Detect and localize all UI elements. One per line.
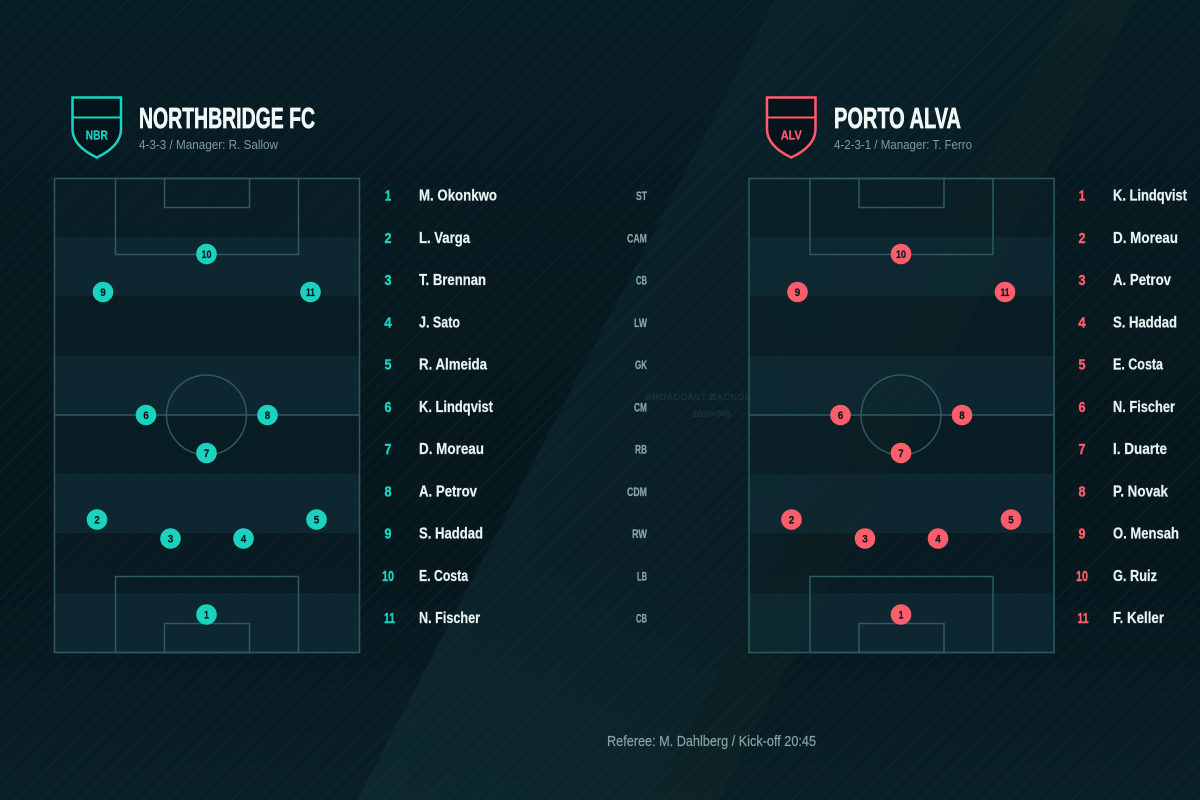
player markers: Northbridge FC: 10 (202, 249, 212, 261)
player markers: Porto Alva (781, 244, 1021, 625)
roster: Northbridge FC: N. Fischer (419, 610, 480, 627)
roster: Northbridge FC: E. Costa (419, 568, 468, 585)
player markers: Northbridge FC: 8 (265, 410, 270, 422)
roster: Porto Alva: 5 (1078, 357, 1086, 374)
roster: Porto Alva: 4 (1078, 314, 1086, 331)
roster: Northbridge FC: 1 (385, 188, 391, 204)
player markers: Northbridge FC: 11 (306, 287, 315, 299)
roster: Porto Alva: O. Mensah (1113, 526, 1179, 543)
roster: Northbridge FC: R. Almeida (419, 357, 487, 374)
player markers: Northbridge FC: 7 (204, 448, 209, 460)
roster: Northbridge FC: 11 (384, 610, 395, 627)
roster: Northbridge FC: 6 (384, 399, 392, 416)
roster: Northbridge FC: D. Moreau (419, 441, 484, 458)
roster: Northbridge FC: LB (637, 569, 647, 583)
roster: Northbridge FC: RW (632, 527, 648, 541)
roster: Porto Alva: 2 (1078, 230, 1086, 247)
team name: NORTHBRIDGE FC (139, 103, 315, 135)
player markers: Northbridge FC: 3 (168, 534, 173, 546)
roster: Northbridge FC: CM (634, 400, 647, 414)
roster: Northbridge FC: 8 (384, 483, 392, 500)
pitch: Northbridge FC (54, 178, 360, 652)
crest: ALV: ALV (781, 128, 802, 142)
player markers: Porto Alva: 2 (789, 514, 794, 526)
roster: Porto Alva: A. Petrov (1113, 272, 1171, 289)
player markers: Porto Alva: 10 (896, 249, 906, 261)
roster: Porto Alva: 7 (1078, 441, 1086, 458)
player markers: Porto Alva: 11 (1000, 287, 1010, 299)
roster: Northbridge FC: 4 (384, 314, 392, 331)
roster: Porto Alva: P. Novak (1113, 483, 1168, 500)
pitch: Porto Alva (748, 178, 1054, 652)
roster: Northbridge FC: A. Petrov (419, 483, 477, 500)
roster: Porto Alva: I. Duarte (1113, 441, 1167, 458)
roster: Porto Alva: 11 (1078, 610, 1088, 627)
panel: Porto Alva (748, 98, 1187, 652)
player markers: Northbridge FC: 6 (143, 410, 149, 422)
roster: Northbridge FC: CB (636, 612, 647, 626)
formation and manager: 4-3-3 / Manager: R. Sallow (139, 137, 279, 152)
roster: Northbridge FC: 9 (384, 526, 392, 543)
roster: Porto Alva: G. Ruiz (1113, 568, 1157, 585)
roster: Northbridge FC: LW (634, 316, 647, 330)
roster: Porto Alva: 1 (1079, 188, 1085, 204)
roster: Porto Alva: S. Haddad (1113, 314, 1177, 331)
player markers: Porto Alva: 9 (795, 287, 800, 299)
watermark: BROADCAST BACKGROUND (645, 392, 780, 403)
roster: Northbridge FC: CB (636, 274, 647, 288)
roster: Northbridge FC: T. Brennan (419, 272, 486, 289)
player markers: Porto Alva: 4 (935, 534, 942, 546)
crest: ALV (767, 98, 816, 158)
roster: Northbridge FC: RB (635, 443, 647, 457)
player markers: Northbridge FC: 9 (100, 287, 106, 299)
panel: Northbridge FC (54, 98, 648, 652)
watermark: 1600×945 (692, 409, 732, 420)
player markers: Northbridge FC: 5 (314, 514, 319, 526)
player markers: Porto Alva: 1 (898, 610, 904, 622)
team header: Northbridge FC (72, 98, 315, 158)
roster: Northbridge FC: S. Haddad (419, 526, 483, 543)
roster: Northbridge FC: L. Varga (419, 230, 470, 247)
roster: Porto Alva: K. Lindqvist (1113, 188, 1187, 204)
crest: NBR (72, 98, 121, 158)
roster: Porto Alva: 9 (1078, 526, 1086, 543)
roster: Northbridge FC: GK (635, 358, 647, 372)
roster: Northbridge FC: K. Lindqvist (419, 399, 493, 416)
roster: Porto Alva (1076, 188, 1187, 627)
player markers: Porto Alva: 8 (959, 410, 965, 422)
roster: Northbridge FC: CAM (627, 231, 647, 245)
roster: Northbridge FC: M. Okonkwo (419, 188, 497, 204)
roster: Porto Alva: 10 (1076, 568, 1088, 585)
roster: Porto Alva: 3 (1078, 272, 1086, 289)
roster: Porto Alva: 6 (1078, 399, 1086, 416)
roster: Porto Alva: 8 (1078, 483, 1086, 500)
player markers: Porto Alva: 7 (898, 448, 904, 460)
crest: NBR: NBR (86, 128, 108, 142)
player markers: Porto Alva: 3 (862, 534, 868, 546)
roster: Northbridge FC: 3 (384, 272, 392, 289)
roster: Porto Alva: E. Costa (1113, 357, 1163, 374)
roster: Northbridge FC: ST (636, 189, 647, 203)
roster: Northbridge FC (382, 188, 648, 627)
roster: Northbridge FC: 10 (382, 568, 394, 585)
watermark (645, 392, 780, 420)
footer: referee and kick-off: Referee: M. Dahlberg / Kick-off 20:45 (607, 734, 816, 750)
roster: Porto Alva: F. Keller (1113, 610, 1164, 627)
roster: Northbridge FC: 7 (384, 441, 392, 458)
team header: Porto Alva (767, 98, 972, 158)
roster: Northbridge FC: J. Sato (419, 314, 460, 331)
team name: PORTO ALVA (834, 103, 961, 135)
roster: Northbridge FC: CDM (627, 485, 647, 499)
player markers: Northbridge FC: 1 (204, 610, 209, 622)
roster: Porto Alva: N. Fischer (1113, 399, 1175, 416)
player markers: Northbridge FC (87, 244, 327, 625)
player markers: Porto Alva: 5 (1008, 514, 1014, 526)
roster: Northbridge FC: 2 (384, 230, 392, 247)
player markers: Northbridge FC: 4 (241, 534, 247, 546)
player markers: Porto Alva: 6 (838, 410, 843, 422)
roster: Northbridge FC: 5 (384, 357, 392, 374)
player markers: Northbridge FC: 2 (94, 514, 100, 526)
roster: Porto Alva: D. Moreau (1113, 230, 1178, 247)
formation and manager: 4-2-3-1 / Manager: T. Ferro (834, 137, 972, 152)
